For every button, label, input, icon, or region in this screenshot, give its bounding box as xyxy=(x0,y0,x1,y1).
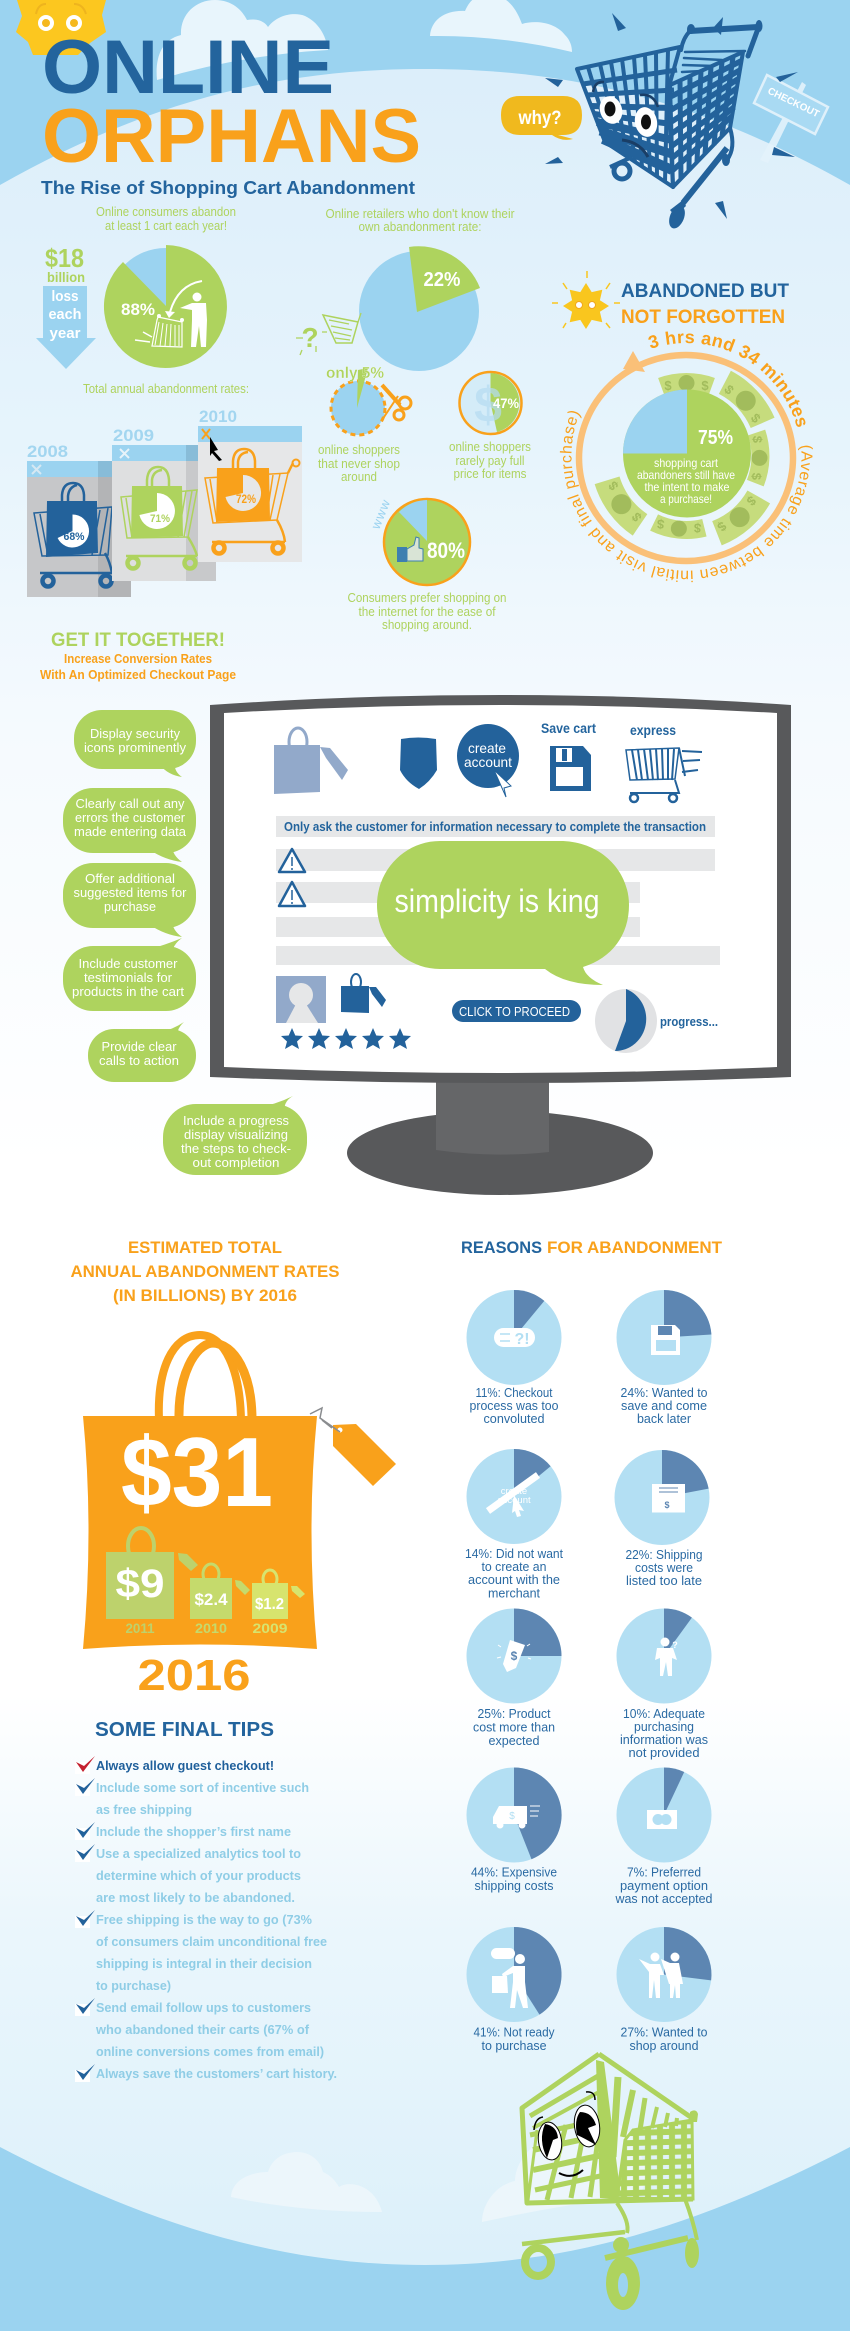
pie chart: 11% checkout convoluted xyxy=(466,1290,562,1426)
icon: check marks xyxy=(75,1756,95,2082)
icon: thumbs up xyxy=(397,537,423,562)
pie chart: 24% save for later: save and come xyxy=(621,1399,707,1413)
pie chart: 14% create account: account with the xyxy=(468,1573,560,1587)
pie chart: 75% xyxy=(623,390,751,518)
cloud: top left xyxy=(157,0,328,80)
icon: dollar bills: $ xyxy=(743,493,759,509)
icon: checkout sign xyxy=(754,75,828,163)
chart: 2009 window xyxy=(112,426,216,581)
chart: 2009 window: 2009 xyxy=(113,426,154,445)
text: retailers: own abandonment rate: xyxy=(358,220,482,234)
instruction bar: Only ask the customer for information necessary to complete the transaction xyxy=(284,819,706,834)
icon: express cart xyxy=(626,748,702,802)
cart face xyxy=(596,93,626,127)
pie chart: 7% payment option xyxy=(615,1768,713,1906)
icon: confused green cart xyxy=(296,313,361,355)
pie chart: 47% xyxy=(460,372,522,434)
tips text: Use a specialized analytics tool to xyxy=(96,1846,301,1861)
text: never shop around xyxy=(318,443,400,484)
chart: 2010 window xyxy=(198,407,302,562)
speech bubble: errors: Clearly call out any xyxy=(76,797,185,811)
text: retailers xyxy=(326,207,514,234)
heading: get it together: Increase Conversion Rates xyxy=(64,652,212,666)
speech bubble: testimonials: products in the cart xyxy=(72,985,185,999)
callout: $18 billion arrow: billion xyxy=(47,269,85,285)
chart: 2010 window: 72% xyxy=(236,494,256,506)
icon: big orange bag: $31 xyxy=(121,1417,273,1527)
pie chart: 88% xyxy=(104,245,227,368)
icon: $9 bag 2011: 2011 xyxy=(126,1620,155,1636)
text: retailers: Online retailers who don't know their xyxy=(326,207,514,221)
pie chart: 80% xyxy=(367,497,470,585)
icon: scissors xyxy=(382,385,411,420)
icon: dollar bills: $ xyxy=(714,518,730,535)
pie chart: 41% not ready: to purchase xyxy=(482,2039,547,2053)
pie chart: 25% product cost xyxy=(466,1608,562,1748)
pie chart: 22% shipping costs: 22%: Shipping xyxy=(626,1548,703,1562)
pie chart: 27% shop around: shop around xyxy=(630,2039,699,2053)
tips text: of consumers claim unconditional free xyxy=(96,1934,327,1949)
pie chart: 27% shop around: 27%: Wanted to xyxy=(620,2026,708,2040)
monitor frame xyxy=(210,695,791,1083)
form fields xyxy=(276,849,720,965)
pie chart: 25% product cost: 25%: Product xyxy=(478,1707,551,1721)
icon: floppy disk xyxy=(550,746,591,791)
pie chart: 10% purchasing info: purchasing xyxy=(634,1720,694,1734)
text: rarely pay full price: rarely pay full xyxy=(456,454,524,468)
pie chart: 7% payment option: payment option xyxy=(620,1879,708,1893)
text: prefer shopping on internet: Consumers prefer shopping on xyxy=(348,591,507,605)
heading: estimated total: (IN BILLIONS) BY 2016 xyxy=(113,1286,297,1305)
icon: sun mascot xyxy=(16,0,106,55)
text: consumers abandon: at least 1 cart each year! xyxy=(105,219,227,233)
text: rarely pay full price: online shoppers xyxy=(449,440,531,454)
cloud: bottom left xyxy=(231,2152,382,2212)
chart: 2008 window: 68% xyxy=(64,531,85,543)
pie chart: 10% purchasing info: 10%: Adequate xyxy=(623,1707,705,1721)
text: never shop around: that never shop xyxy=(318,457,400,471)
tips text: online conversions comes from email) xyxy=(96,2044,324,2059)
pie chart: 14% create account xyxy=(465,1449,564,1600)
icon: checkout sign: CHECKOUT xyxy=(766,86,821,120)
callout: $18 billion arrow xyxy=(36,243,96,369)
heading: abandoned but not forgotten: NOT FORGOTTEN xyxy=(621,307,785,328)
speech bubble: suggested items: suggested items for xyxy=(74,886,186,900)
pie chart: 41% not ready xyxy=(466,1927,562,2053)
speech bubble: progress display xyxy=(163,1096,307,1175)
chart: 2008 window xyxy=(27,442,131,597)
monitor stand and base xyxy=(347,1080,653,1195)
button: create account: create xyxy=(468,740,506,756)
text: www: www xyxy=(367,497,393,532)
speech bubble: progress display: out completion xyxy=(192,1156,280,1170)
text: average time: (Average time between initial visit and final purchase) xyxy=(560,411,813,582)
tips text: Always allow guest checkout! xyxy=(96,1758,274,1773)
icon: dollar bills: $ xyxy=(721,382,738,398)
heading: reasons for abandonment: FOR ABANDONMENT xyxy=(547,1238,723,1257)
icon: customer profile xyxy=(276,976,326,1023)
text: prefer shopping on internet xyxy=(348,591,507,632)
pie chart: 11% checkout convoluted: process was too xyxy=(470,1399,559,1413)
tips text: shipping is integral in their decision xyxy=(96,1956,312,1971)
speech bubble: why: why? xyxy=(518,108,562,129)
icon: small sun xyxy=(552,271,620,329)
speech bubble: progress display: display visualizing xyxy=(184,1128,288,1142)
pie chart: 22%: 22% xyxy=(424,269,461,291)
speech bubble: suggested items: purchase xyxy=(104,900,156,914)
speech bubble: security icons: Display security xyxy=(90,727,181,741)
pie chart: 25% product cost: $ xyxy=(511,1649,518,1663)
button: create account xyxy=(457,724,519,797)
pie chart: 10% purchasing info xyxy=(616,1608,712,1760)
icon: warning triangles xyxy=(279,849,305,906)
speech bubble: security icons: icons prominently xyxy=(84,741,187,755)
pie chart: 11% checkout convoluted: ?! xyxy=(514,1331,530,1348)
pie chart: 44% shipping costs: shipping costs xyxy=(474,1879,554,1893)
icon: $9 bag 2011 xyxy=(106,1528,198,1636)
cart side panel xyxy=(670,52,743,187)
speech bubble: security icons xyxy=(74,710,196,777)
tips text: Always save the customers’ cart history. xyxy=(96,2066,337,2081)
pie chart: 24% save for later xyxy=(616,1290,712,1426)
text: 3 hrs and 34 minutes: 3 hrs and 34 minutes xyxy=(648,332,806,427)
speech bubble: calls to action: Provide clear xyxy=(102,1040,176,1054)
cart handle xyxy=(681,26,759,72)
pie chart: 14% create account: merchant xyxy=(488,1586,541,1600)
chart: 2010 window: 2010 xyxy=(199,407,237,426)
heading: reasons for abandonment xyxy=(461,1238,723,1257)
callout: $18 billion arrow: loss xyxy=(52,288,78,305)
title: ONLINE xyxy=(42,25,334,110)
cart legs and wheels xyxy=(522,2199,697,2276)
button: click to proceed: CLICK TO PROCEED xyxy=(459,1004,570,1019)
pie chart: progress xyxy=(595,989,718,1053)
heading: reasons for abandonment: REASONS xyxy=(461,1238,542,1257)
heading: get it together: GET IT TOGETHER! xyxy=(51,630,225,651)
icon: $1.2 bag 2009: 2009 xyxy=(252,1620,288,1636)
icon: $2.4 bag 2010: 2010 xyxy=(195,1620,227,1636)
cart legs and wheels xyxy=(610,128,732,203)
checklist: final tips xyxy=(75,1756,337,2082)
text: save cart: Save cart xyxy=(541,720,596,736)
speech bubble: calls to action xyxy=(88,1022,196,1082)
pie chart: 80%: 80% xyxy=(427,538,465,563)
pie chart: 44% shipping costs: 44%: Expensive xyxy=(471,1866,557,1880)
tips text: to purchase) xyxy=(96,1978,171,1993)
speech bubble: suggested items xyxy=(63,863,196,937)
icon: mouse cursor xyxy=(210,437,222,461)
pie chart: 22% shipping costs: listed too late xyxy=(626,1574,702,1588)
text: rarely pay full price xyxy=(449,440,531,481)
pie chart: 10% purchasing info: ? xyxy=(672,1640,678,1650)
text: consumers abandon xyxy=(96,205,236,233)
speech bubble: errors: errors the customer xyxy=(75,811,185,825)
tips text: who abandoned their carts (67% of xyxy=(95,2022,310,2037)
icon: $1.2 bag 2009 xyxy=(252,1570,305,1636)
pie chart: 10% purchasing info: not provided xyxy=(628,1746,700,1760)
text: intent to purchase: a purchase! xyxy=(660,492,712,506)
cart front panel xyxy=(577,47,680,187)
text: intent to purchase: abandoners still have xyxy=(637,468,735,482)
icon: dollar bills: $ xyxy=(749,473,764,481)
heading: estimated total: ESTIMATED TOTAL xyxy=(128,1238,282,1257)
icon: $2.4 bag 2010 xyxy=(190,1564,250,1636)
heading: get it together: With An Optimized Checkout Page xyxy=(40,668,236,682)
icon: small bag with tag xyxy=(341,974,386,1013)
cart face xyxy=(536,2121,564,2161)
pie chart: 14% create account: account xyxy=(497,1495,531,1506)
tips text: as free shipping xyxy=(96,1802,192,1817)
pie chart: 22% xyxy=(359,246,480,371)
speech bubble: simplicity is king xyxy=(377,841,629,985)
pie chart: 11% checkout convoluted: 11%: Checkout xyxy=(476,1386,553,1400)
icon: dollar bills: $ xyxy=(664,378,672,393)
icon: dollar bills: $ xyxy=(692,520,702,536)
pie chart: 22% shipping costs: $ xyxy=(664,1500,670,1510)
text: 75%: 75% xyxy=(698,427,733,449)
tips text xyxy=(95,1758,337,2081)
instruction bar xyxy=(276,816,715,837)
icon: dollar bills: $ xyxy=(628,509,645,525)
pie chart: 47%: 47% xyxy=(493,395,520,411)
pie chart: 47%: $ xyxy=(474,377,502,433)
heading: abandoned but not forgotten: ABANDONED BUT xyxy=(621,281,789,302)
heading: estimated total xyxy=(70,1238,340,1305)
speech bubble: why xyxy=(501,96,582,140)
cloud: bottom right xyxy=(482,2120,645,2222)
pie chart: only 5% xyxy=(326,365,411,435)
button: click to proceed xyxy=(452,1000,581,1022)
pie chart: 27% shop around xyxy=(616,1927,712,2053)
pie chart: 7% payment option: 7%: Preferred xyxy=(627,1866,701,1880)
title: ORPHANS xyxy=(42,94,421,179)
icon: sad blue shopping cart xyxy=(577,20,762,231)
chart: 2009 window: 71% xyxy=(150,513,170,525)
icon: confused green cart: ? xyxy=(301,322,319,353)
tips text: Include some sort of incentive such xyxy=(96,1780,309,1795)
text: intent to purchase: shopping cart xyxy=(654,456,719,470)
icon: light bag with tag xyxy=(274,728,348,794)
text: prefer shopping on internet: the internet for the ease of xyxy=(358,605,496,619)
speech bubble: testimonials: testimonials for xyxy=(84,971,172,985)
speech bubble: simplicity is king: simplicity is king xyxy=(394,883,600,919)
chart: abandonment ring xyxy=(560,332,813,582)
cart side panel xyxy=(617,2120,693,2199)
callout: $18 billion arrow: $18 xyxy=(45,243,84,273)
pie chart: 14% create account: to create an xyxy=(482,1560,547,1574)
pie chart: 14% create account: create xyxy=(501,1486,527,1497)
pie chart: 14% create account: 14%: Did not want xyxy=(465,1547,564,1561)
monitor screen xyxy=(224,705,777,1073)
pie chart: 7% payment option: was not accepted xyxy=(615,1892,713,1906)
speech bubble: testimonials: Include customer xyxy=(78,957,178,971)
text: rarely pay full price: price for items xyxy=(454,467,526,481)
icon: dollar bills: $ xyxy=(748,410,764,426)
text: intent to purchase: the intent to make xyxy=(644,480,730,494)
icon: happy green shopping cart xyxy=(522,2054,699,2310)
cloud: top right xyxy=(430,0,572,52)
title xyxy=(42,25,421,179)
tips text: determine which of your products xyxy=(96,1868,301,1883)
icon: big orange bag xyxy=(83,1335,396,1649)
tips text: Send email follow ups to customers xyxy=(96,2000,311,2015)
pie chart: 22% shipping costs xyxy=(614,1450,710,1588)
pie chart: 24% save for later: back later xyxy=(637,1412,691,1426)
icon: $1.2 bag 2009: $1.2 xyxy=(255,1596,284,1613)
button: create account: account xyxy=(464,754,512,770)
heading: estimated total: ANNUAL ABANDONMENT RATES xyxy=(70,1262,340,1281)
pie chart: 44% shipping costs xyxy=(466,1767,562,1893)
text: total annual abandonment: Total annual abandonment rates: xyxy=(83,382,249,396)
icon: surprise spikes xyxy=(545,13,798,219)
pie chart: 24% save for later: 24%: Wanted to xyxy=(620,1386,708,1400)
icon: $2.4 bag 2010: $2.4 xyxy=(194,1590,228,1609)
text: 2016: 2016 xyxy=(138,1651,250,1700)
text: express: express xyxy=(630,722,676,738)
icon: dollar bills xyxy=(597,374,772,543)
callout: $18 billion arrow: year xyxy=(50,325,81,342)
pie slice: 25% xyxy=(623,390,687,454)
callout: $18 billion arrow: each xyxy=(48,306,82,323)
speech bubble: errors: made entering data xyxy=(74,825,186,839)
text: consumers abandon: Online consumers abandon xyxy=(96,205,236,219)
pie chart: 25% product cost: expected xyxy=(488,1734,540,1748)
heading: abandoned but not forgotten xyxy=(621,281,789,328)
icon: five star rating xyxy=(281,1028,411,1049)
pie chart: 41% not ready: 41%: Not ready xyxy=(474,2026,555,2040)
speech bubble: errors xyxy=(63,788,196,862)
text: never shop around: online shoppers xyxy=(318,443,400,457)
icon: dollar bills: $ xyxy=(656,516,665,532)
tips text: Free shipping is the way to go (73% xyxy=(96,1912,312,1927)
pie chart: 88%: 88% xyxy=(121,300,155,319)
speech bubble: suggested items: Offer additional xyxy=(85,872,175,886)
text: prefer shopping on internet: shopping around. xyxy=(382,618,472,632)
icon: dollar bills: $ xyxy=(605,478,622,493)
cart front panel xyxy=(596,2060,620,2199)
pie chart: progress: progress... xyxy=(660,1014,718,1029)
pie chart: 11% checkout convoluted: convoluted xyxy=(484,1412,545,1426)
speech bubble: progress display: Include a progress xyxy=(183,1114,289,1128)
tips text: Include the shopper’s first name xyxy=(96,1824,291,1839)
speech bubble: testimonials xyxy=(63,938,196,1011)
pie chart: 22% shipping costs: costs were xyxy=(635,1561,693,1575)
icon: dollar bills: $ xyxy=(701,378,709,393)
pie chart: 25% product cost: cost more than xyxy=(473,1720,555,1734)
speech bubble: progress display: the steps to check- xyxy=(181,1142,291,1156)
heading: get it together xyxy=(40,630,236,682)
icon: dollar bills: $ xyxy=(750,436,765,444)
heading: some final tips: SOME FINAL TIPS xyxy=(95,1719,274,1741)
icon: man dropping cart xyxy=(135,281,207,347)
pie chart: only 5%: only 5% xyxy=(326,365,384,382)
chart: 2008 window: 2008 xyxy=(27,442,68,461)
speech bubble: calls to action: calls to action xyxy=(99,1054,179,1068)
icon: $9 bag 2011: $9 xyxy=(116,1562,164,1606)
text: intent to purchase xyxy=(637,456,735,506)
text: never shop around: around xyxy=(341,470,377,484)
pie chart: 10% purchasing info: information was xyxy=(620,1733,708,1747)
subtitle: The Rise of Shopping Cart Abandonment xyxy=(41,177,415,198)
icon: security shield xyxy=(400,738,437,789)
pie chart: 44% shipping costs: $ xyxy=(509,1811,515,1822)
tips text: are most likely to be abandoned. xyxy=(96,1890,295,1905)
